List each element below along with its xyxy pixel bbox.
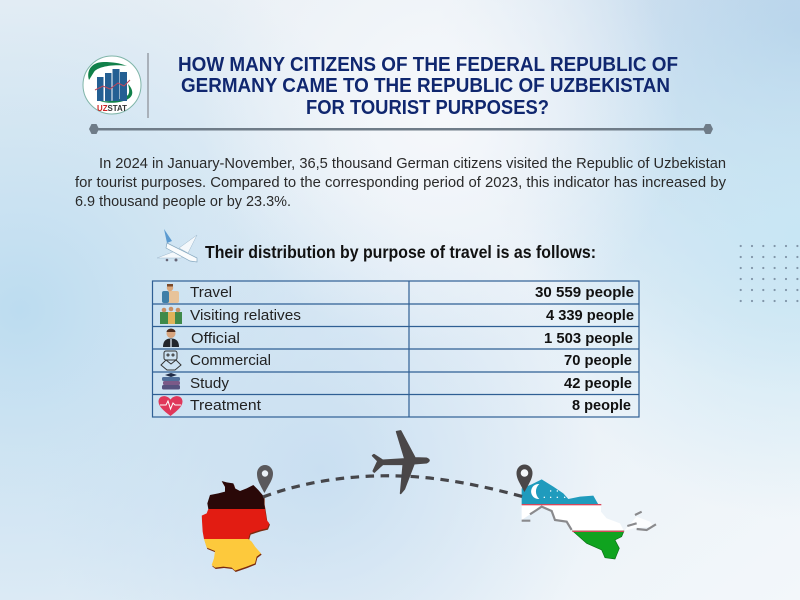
intro paragraph: 6.9 thousand people or by 23.3%. xyxy=(75,193,291,210)
title: HOW MANY CITIZENS OF THE FEDERAL REPUBLIC OF xyxy=(178,53,678,76)
dashed flight path xyxy=(263,476,528,498)
row: study: Study xyxy=(190,375,230,392)
row: commercial xyxy=(190,352,632,369)
row: treatment xyxy=(190,397,631,414)
subheading: Their distribution by purpose of travel is as follows: xyxy=(205,242,596,262)
map: Germany xyxy=(202,481,270,572)
title: GERMANY CAME TO THE REPUBLIC OF UZBEKISTAN xyxy=(181,74,670,97)
logo: UZSTAT: UZSTAT xyxy=(97,103,128,113)
icon: Germany location pin xyxy=(257,465,273,493)
title divider xyxy=(89,124,713,134)
logo divider xyxy=(147,53,149,118)
row: commercial: Commercial xyxy=(190,352,271,369)
row: travel: 30 559 people xyxy=(535,284,634,301)
row: study xyxy=(190,375,632,392)
icon: airplane silhouette xyxy=(373,431,429,493)
row: visiting relatives: Visiting relatives xyxy=(190,307,301,324)
map: Uzbekistan xyxy=(522,479,656,559)
title: FOR TOURIST PURPOSES? xyxy=(306,96,549,119)
logo: UZSTAT xyxy=(83,56,141,114)
row: visiting relatives: 4 339 people xyxy=(546,307,634,324)
title xyxy=(178,53,678,119)
row: official: Official xyxy=(191,330,240,347)
row: study: 42 people xyxy=(564,375,632,392)
intro paragraph: for tourist purposes. Compared to the corresponding period of 2023, this indicator has increased by xyxy=(75,174,726,191)
icon: books xyxy=(162,373,180,390)
table: distribution by purpose of travel xyxy=(152,281,639,417)
icon: traveller xyxy=(162,284,179,303)
row: travel xyxy=(190,284,634,301)
icon: handshake xyxy=(161,351,181,370)
icon: airplane xyxy=(157,229,197,262)
row: visiting relatives xyxy=(190,307,634,324)
row: official: 1 503 people xyxy=(544,330,633,347)
intro paragraph: In 2024 in January-November, 36,5 thousand German citizens visited the Republic of Uzbekistan xyxy=(99,155,726,172)
row: official xyxy=(191,330,633,347)
icon: official xyxy=(163,329,179,347)
row: travel: Travel xyxy=(190,284,232,301)
icon: heart xyxy=(158,396,182,416)
row: treatment: 8 people xyxy=(572,397,631,414)
intro paragraph xyxy=(75,155,726,210)
row: treatment: Treatment xyxy=(190,397,262,414)
icon: relatives xyxy=(160,307,182,324)
icon: Uzbekistan location pin xyxy=(516,464,532,492)
dot grid decoration xyxy=(740,245,799,302)
row: commercial: 70 people xyxy=(564,352,632,369)
